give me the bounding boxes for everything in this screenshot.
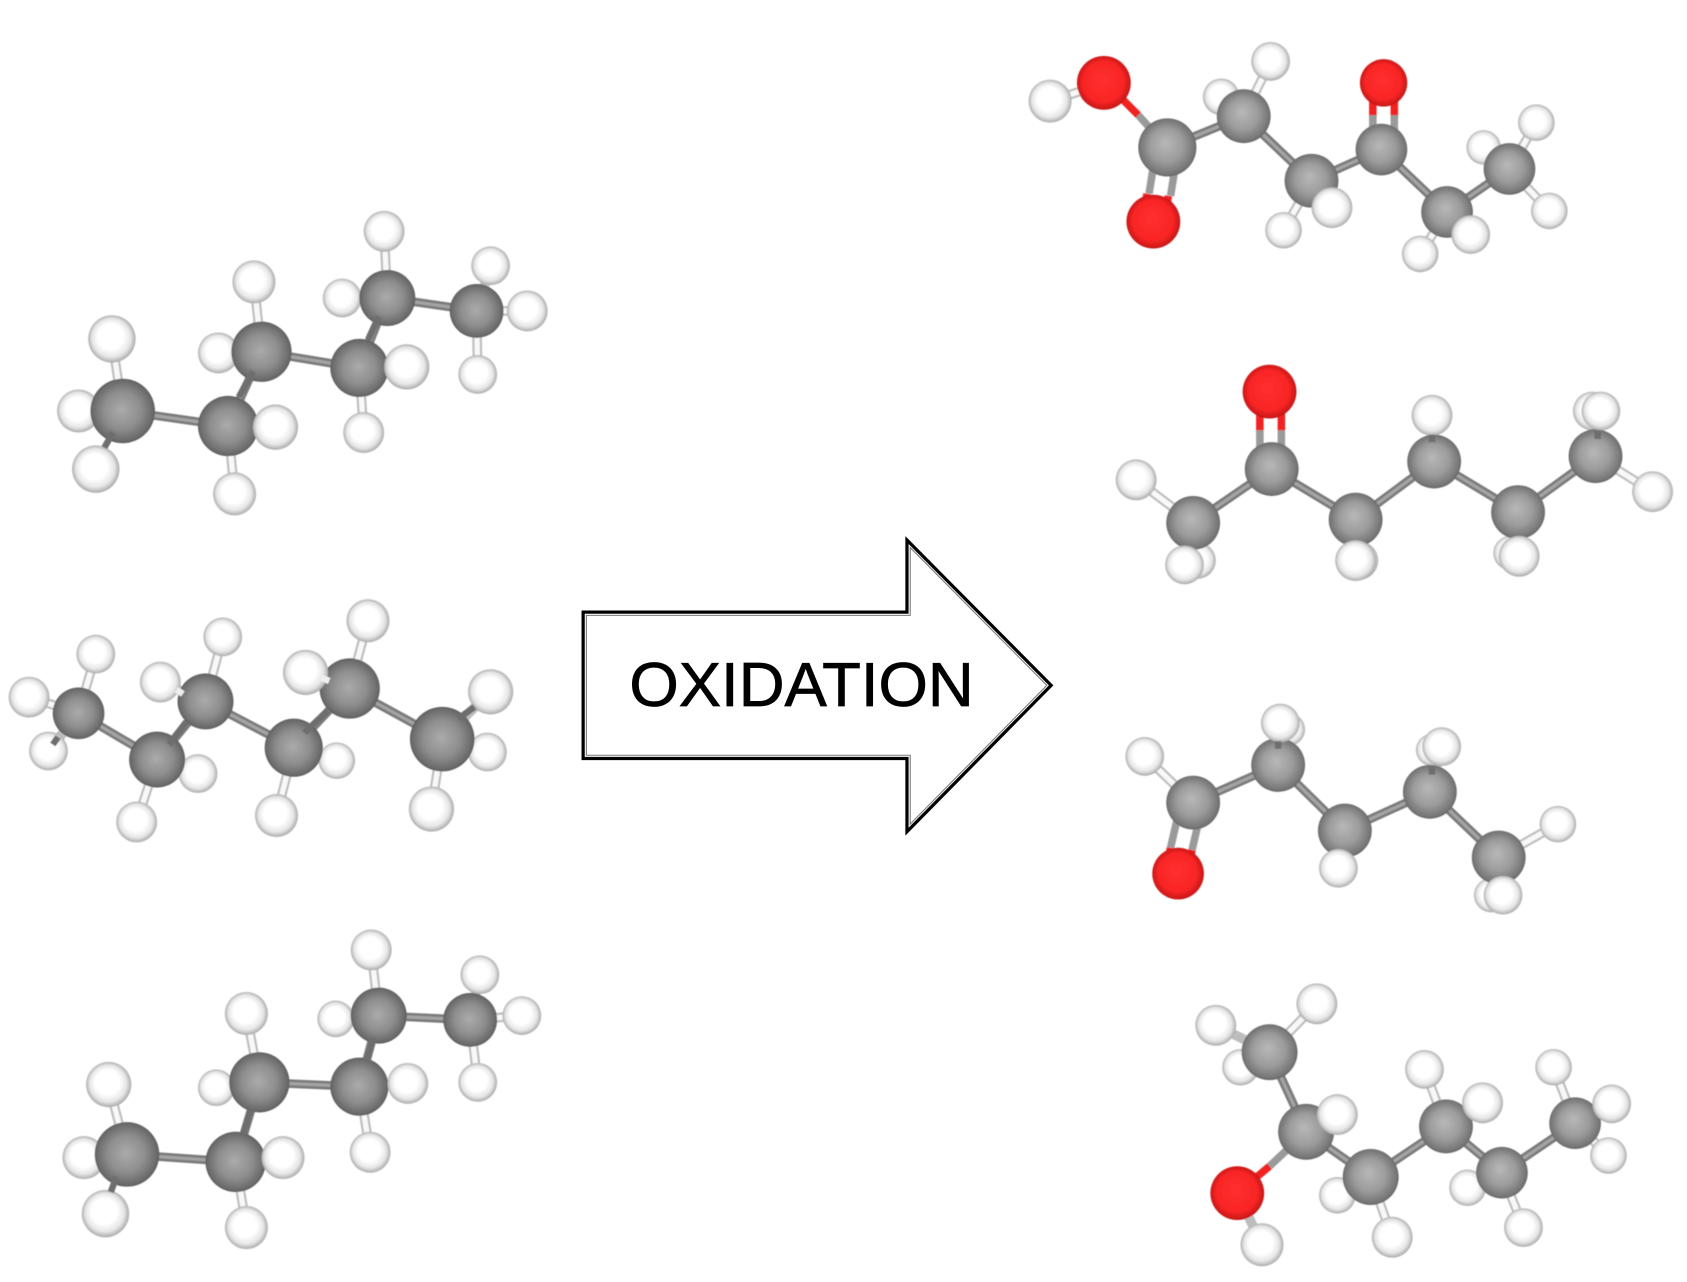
molecule: keto acid top right bbox=[1029, 42, 1568, 272]
molecule: alcohol bottom right bbox=[1195, 983, 1631, 1266]
molecule: alkane bottom left bbox=[62, 930, 541, 1249]
molecule: aldehyde lower right bbox=[1125, 704, 1576, 914]
arrow label: OXIDATION bbox=[629, 651, 974, 720]
molecule: ketone upper right bbox=[1116, 365, 1673, 584]
arrow: oxidation bbox=[583, 540, 1051, 832]
molecule: alkane middle left bbox=[9, 599, 513, 842]
molecule: alkane top left bbox=[57, 211, 548, 515]
